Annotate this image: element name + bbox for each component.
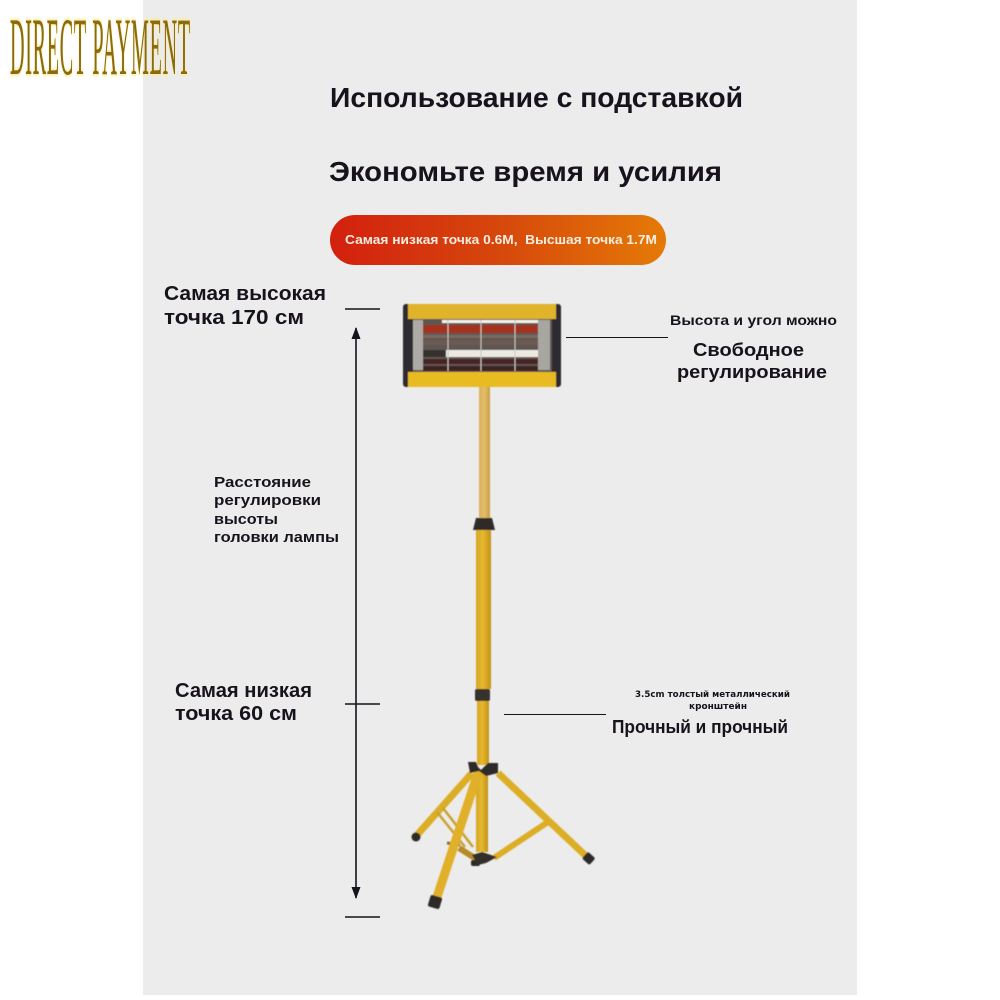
note: metal bracket: 3.5cm толстый металлический	[635, 690, 790, 700]
note: metal bracket: кронштейн	[689, 702, 747, 712]
tripod legs	[417, 770, 587, 900]
label: height adjustment distance: высоты	[214, 511, 278, 528]
height range pill	[330, 215, 666, 265]
label: highest point	[164, 283, 326, 329]
label: height adjustment distance: регулировки	[214, 492, 321, 509]
label: highest point: точка 170 см	[164, 307, 304, 329]
arrow: height adjustment range	[355, 328, 357, 898]
note: metal bracket	[635, 690, 790, 712]
leader line: bracket	[504, 714, 606, 716]
lower collar	[475, 689, 490, 701]
title line 1: Использование с подставкой	[330, 82, 743, 113]
label: height adjustment distance: головки лампы	[214, 529, 339, 546]
callout: free adjustment: Свободное	[693, 339, 804, 360]
height dimension marks	[345, 309, 380, 917]
lower tube	[477, 701, 489, 765]
background panel	[143, 0, 857, 995]
heater head	[403, 304, 561, 387]
badge: direct payment: DIRECT PAYMENT	[10, 1, 191, 92]
callout: free adjustment: регулирование	[677, 361, 827, 382]
tripod feet	[412, 832, 595, 909]
middle tube	[476, 530, 491, 689]
label: highest point: Самая высокая	[164, 283, 326, 305]
lower bracket	[472, 852, 497, 865]
heater stand	[403, 304, 595, 909]
badge: direct payment: DIRECT PAYMENT	[10, 1, 191, 92]
upper pole	[479, 387, 490, 519]
upper collar	[473, 518, 495, 530]
pill text: Самая низкая точка 0.6M, Высшая точка 1.7M	[345, 233, 657, 247]
label: lowest point	[175, 680, 312, 725]
title line 2: Экономьте время и усилия	[329, 156, 722, 187]
leader line: head adjustment	[566, 336, 668, 338]
tube under hub	[476, 770, 488, 852]
label: height adjustment distance	[214, 474, 339, 546]
label: lowest point: точка 60 см	[175, 703, 297, 725]
callout: durable: Прочный и прочный	[612, 716, 788, 737]
label: height adjustment distance: Расстояние	[214, 474, 311, 491]
tripod hub	[468, 762, 498, 776]
label: lowest point: Самая низкая	[175, 680, 312, 702]
callout: free adjustment	[677, 339, 827, 382]
note: height and angle: Высота и угол можно	[670, 312, 837, 328]
